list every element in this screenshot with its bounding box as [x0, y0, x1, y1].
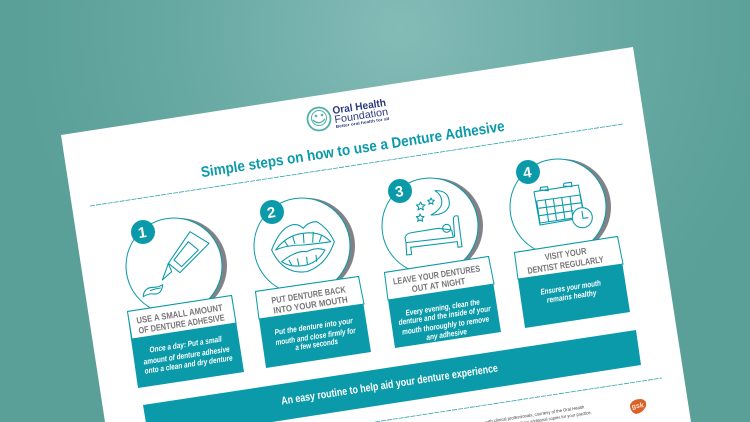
panel: step 2 [255, 276, 371, 368]
step 1 body text: Once a day: Put a small [149, 334, 223, 354]
number badge 3: 3 [394, 183, 405, 201]
icon: adhesive tube [143, 232, 209, 297]
banner [143, 330, 641, 422]
step 2 heading [271, 284, 348, 316]
panel: step 4 [514, 236, 630, 328]
icon: calendar and clock [534, 182, 592, 228]
step 1 body text: onto a clean and dry denture [144, 353, 234, 376]
number badge 3 [388, 179, 412, 203]
dashed divider bottom [375, 378, 662, 422]
logo wordmark [332, 97, 390, 129]
number badge 1: 1 [137, 224, 148, 242]
step 1 heading [136, 302, 225, 336]
number badge 2: 2 [266, 204, 277, 222]
step 4 body text [540, 278, 602, 305]
title: Simple steps on how to use a Denture Adhesive [200, 118, 506, 181]
step 4 circle with shadow [510, 159, 611, 255]
step 3 body text: denture and the inside of your [398, 304, 492, 327]
step 3 body text: Every evening, clean the [405, 297, 481, 318]
step 4 heading: VISIT YOUR [544, 246, 587, 262]
step 2 heading: INTO YOUR MOUTH [273, 294, 348, 316]
dashed divider top [90, 124, 623, 206]
step 2 body text: a few seconds [295, 337, 339, 352]
step 4 heading [527, 246, 604, 276]
banner text: An easy routine to help aid your denture experience [280, 363, 499, 408]
number badge 2 [260, 200, 284, 224]
step 1 heading: OF DENTURE ADHESIVE [138, 313, 225, 336]
step 2 body text: Put the denture into your [274, 316, 354, 337]
logo wordmark: Foundation [334, 106, 389, 126]
step 2 circle with shadow [254, 198, 355, 294]
step 1 circle with shadow [126, 218, 227, 314]
step 3 circle with shadow [382, 178, 483, 274]
step 1 body text [143, 334, 234, 376]
logo wordmark: Oral Health [332, 97, 387, 117]
number badge 4 [516, 160, 540, 184]
panel: step 3 [384, 256, 501, 348]
number badge 1 [131, 220, 155, 244]
number badge 4: 4 [522, 164, 533, 182]
step 2 body text: mouth and close firmly for [275, 326, 357, 347]
logo wordmark: Better oral health for all [335, 116, 390, 129]
icon: open mouth with teeth [272, 222, 334, 272]
icon: smiling face [308, 108, 330, 130]
step 3 body text: any adhesive [426, 327, 468, 342]
step 2 body text [274, 316, 357, 352]
step 4 heading: DENTIST REGULARLY [527, 254, 604, 276]
logo: GSK [630, 399, 646, 414]
step 2 heading: PUT DENTURE BACK [271, 284, 347, 306]
step 3 heading: LEAVE YOUR DENTURES [392, 263, 481, 287]
icon: moon, stars and bed [405, 191, 462, 255]
white poster sheet [61, 47, 691, 422]
step 3 heading [392, 263, 481, 294]
panel: step 1 [127, 295, 244, 388]
step 4 body text: Ensures your mouth [540, 278, 602, 297]
logo: Oral Health Foundation [308, 97, 390, 130]
step 3 heading: OUT AT NIGHT [411, 276, 466, 294]
step 1 body text: amount of denture adhesive [143, 344, 231, 367]
step 3 body text [398, 297, 492, 342]
step 3 body text: mouth thoroughly to remove [401, 314, 490, 337]
logo: GSK: gsk [631, 402, 644, 411]
step 4 body text: remains healthy [546, 288, 597, 305]
step 1 heading: USE A SMALL AMOUNT [136, 302, 224, 326]
